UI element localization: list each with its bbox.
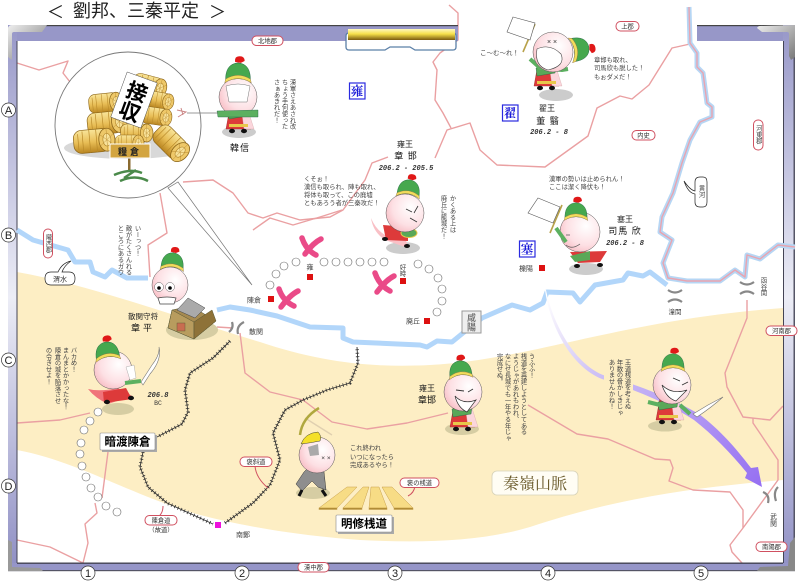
label: Sima Xin: 司馬 欣 — [608, 225, 642, 236]
speech: Dong Yi: 章邯も取れ、 — [594, 55, 632, 64]
region label: Di: 翟 — [504, 106, 516, 120]
speech: Zhang Han bottom: 桟道を再建しようとしてある — [520, 352, 527, 435]
commandery tag: Henan: 河南郡 — [772, 326, 792, 335]
axis marker 3 — [388, 566, 402, 580]
frame corner: top right — [757, 25, 795, 60]
label: Zhang Han bottom: 雍王 — [419, 384, 435, 393]
character: Zhang Han top — [371, 172, 424, 254]
gate: Sanguan — [229, 322, 244, 334]
battle mark: Chencang — [279, 289, 298, 307]
march route: Chencang road — [76, 408, 121, 516]
label: Zhang Ping: 散関守将 — [128, 311, 158, 321]
city: Yong: 雍 — [306, 264, 314, 272]
speech: Zhang Ping: ところにあるガウ — [116, 225, 124, 276]
city: Nanzheng: 南鄭 — [236, 530, 250, 539]
label: Wuguan: 武関 — [768, 512, 777, 528]
tag: Chencang road (old road): 陳倉道 — [152, 516, 171, 524]
sign: 接収 — [110, 72, 157, 129]
tag: Chencang road (old road) — [145, 506, 177, 534]
speech: Liu Bang's general: の令きせよ！ — [44, 347, 52, 385]
title: ＜ — [47, 3, 64, 22]
axis marker 2: 2 — [239, 568, 245, 580]
city: Yueyang: 櫟陽 — [519, 264, 533, 273]
commandery tag: Beidi — [252, 36, 283, 46]
label: Zhang Han top: 章 邯 — [394, 150, 418, 161]
river callout: Yellow River: 黄河 — [698, 184, 705, 198]
tile: Xianyang: 咸 — [467, 312, 476, 323]
speech: Han Xin — [272, 78, 296, 131]
speech: Zhang Han bottom: なにせ長城でも一年やる年じゃ — [504, 353, 511, 441]
character: miner repairing the plank road — [296, 408, 335, 499]
character: general grinning with sword — [648, 348, 723, 432]
speech: Han Xin: ちょう手何使った — [280, 79, 288, 130]
city: Feiqiu — [406, 316, 430, 326]
speech: Dong Yi: 司馬欣も脱した！ — [594, 63, 644, 72]
date: 206.8 BC — [147, 392, 169, 407]
title: 劉邦、三秦平定 — [73, 1, 199, 21]
Yellow River — [660, 7, 795, 281]
speech: Zhang Han retreat: 廃丘に籠城だ！ — [440, 194, 447, 239]
speech: Zhang Han: 将体も取って、この廃墟 — [304, 190, 373, 199]
axis marker 1: 1 — [85, 568, 91, 580]
label: Dong Yi: 翟王 — [539, 104, 555, 113]
region label: Yong: 雍 — [351, 84, 364, 98]
speech: Han Xin: さぁあきれだ！ — [272, 79, 280, 123]
city: Haozhi: 畤 — [400, 269, 407, 278]
label: Zhang Ping: 章平 — [131, 323, 155, 333]
axis marker 2 — [235, 566, 249, 580]
speech: Liu Bang's general — [44, 346, 77, 410]
sign: 糧倉: 糧倉 — [118, 146, 142, 157]
character: Dong Yi — [507, 17, 597, 101]
axis marker D: D — [5, 481, 13, 493]
Wei River — [17, 230, 667, 347]
commandery tag: Henan — [766, 326, 797, 336]
speech: Zhang Han retreat — [440, 194, 456, 239]
label: Sima Xin: 塞王 — [617, 214, 633, 224]
banner: 暗渡陳倉: 暗渡陳倉 — [104, 434, 151, 448]
speech: Zhang Han bottom: 完成せぬ。 — [496, 353, 503, 384]
title: ＞ — [209, 3, 226, 22]
axis marker 4 — [541, 566, 555, 580]
speech: Zhang Ping: 敵がたくさんれる — [124, 224, 132, 276]
mountain band: Qinling foothills — [17, 272, 783, 541]
speech: Zhang Han retreat: かくある上は — [448, 195, 456, 233]
banner: 暗渡陳倉 — [100, 433, 157, 452]
sign: 接収: 収 — [116, 98, 143, 127]
label: Tongguan: 潼関 — [668, 307, 682, 316]
speech: Zhang Han bottom: ようじゃがあれもわれ、 — [512, 353, 519, 422]
commandery tag: Hedong — [754, 120, 763, 150]
speech: general grinning: 年数の脅かしきじゃ — [616, 358, 623, 416]
speech: Zhang Han: 漢信も取られ、陣も取れ、 — [304, 182, 380, 191]
speech: Sima Xin: 漢軍の勢いは止められん！ — [549, 174, 625, 183]
speech: Liu Bang's general: まんまとかかったな！ — [62, 347, 69, 410]
speech: Liu Bang's general: バカめ！ — [70, 347, 77, 372]
axis marker 1 — [81, 566, 95, 580]
speech: Sima Xin: ここは潔く降伏も！ — [549, 182, 606, 191]
axis marker A: A — [5, 105, 13, 117]
railway roads — [140, 341, 358, 524]
speech: Sima Xin — [549, 174, 625, 191]
character: miner repairing the plank road: × × — [321, 455, 331, 462]
icon: rice bales — [73, 72, 193, 165]
city: Nanzheng — [215, 522, 250, 539]
label: Qinling Mountains — [492, 471, 578, 495]
axis marker C — [2, 353, 16, 367]
city: Feiqiu: 廃丘 — [406, 316, 420, 326]
label: Zhang Han bottom: 章邯 — [418, 394, 436, 405]
axis marker 3: 3 — [392, 568, 398, 580]
tag: Baoxie road: 褒斜道 — [247, 457, 266, 466]
commandery tag: Hedong: 河東郡 — [755, 125, 762, 145]
date: 206.8 BC: BC — [154, 400, 162, 407]
axis marker A — [2, 103, 16, 117]
commandery tag: Shang: 上郡 — [621, 22, 634, 30]
banner: 明修桟道: 明修桟道 — [341, 516, 387, 530]
axis marker 5 — [694, 566, 708, 580]
tile: Xianyang: 陽 — [467, 322, 476, 332]
label: Dong Yi: 206.2 - 8 — [530, 129, 569, 137]
speech: Zhang Han bottom — [496, 352, 535, 441]
character: Sima Xin — [528, 197, 607, 275]
character: Liu Bang's general with sword — [88, 334, 160, 415]
battle mark: Yong — [302, 238, 321, 255]
character: Dong Yi: × × — [547, 39, 557, 46]
city: Haozhi: 好 — [400, 262, 407, 272]
scroll ornament at top of frame — [346, 29, 456, 50]
speech: miner: これ終われ — [350, 443, 382, 452]
commandery tag: Neishi: 内史 — [637, 130, 650, 140]
label: Zhang Han top: 雍王 — [397, 140, 413, 149]
label: Sima Xin: 206.2 - 8 — [606, 240, 645, 248]
sign: 接収: 接 — [123, 79, 150, 107]
speech: Zhang Han: くそぉ！ — [304, 175, 329, 183]
label: Zhang Han bottom — [418, 384, 436, 405]
axis marker 5: 5 — [698, 568, 704, 580]
commandery tag: Hanzhong: 漢中郡 — [304, 562, 324, 572]
tag: Bao plank road — [400, 478, 439, 496]
speech: Zhang Han bottom: うふふ！ — [528, 353, 535, 378]
gate: Wuguan — [763, 487, 778, 503]
city: Haozhi — [400, 262, 407, 284]
speech: miner: いつになったら — [350, 453, 394, 461]
axis marker B — [2, 228, 16, 242]
label: Sima Xin — [606, 214, 645, 248]
commandery tag: Longxi: 隴西郡 — [44, 233, 52, 254]
axis marker 4: 4 — [545, 568, 551, 580]
gate: Tongguan — [668, 290, 682, 302]
speech: miner — [350, 443, 394, 469]
speech: Liu Bang's general: 陳倉の城を陥落させ — [54, 346, 61, 404]
city: Yong — [306, 264, 314, 280]
label: Dong Yi — [530, 104, 569, 137]
axis marker D — [2, 479, 16, 493]
frame corner: top left — [8, 25, 47, 60]
sign: 糧倉 — [110, 144, 150, 181]
date: 206.8 BC: 206.8 — [147, 392, 169, 400]
label: Zhang Ping — [128, 311, 158, 333]
axis marker C: C — [5, 355, 13, 367]
label: Hangu pass: 函谷関 — [760, 277, 767, 297]
character: Zhang Han bottom grinning — [444, 354, 482, 435]
banner: 明修桟道 — [336, 515, 394, 534]
tag: Baoxie road — [240, 457, 272, 488]
axis marker B: B — [5, 230, 12, 242]
label: Dong Yi: 董 翳 — [536, 115, 560, 126]
speech: Zhang Ping: いーっつ！ — [134, 225, 141, 257]
label: Zhang Han top: 206.2 - 205.5 — [379, 165, 434, 173]
label: Zhang Han top — [379, 140, 434, 173]
speech: miner: 完成あるやら！ — [350, 460, 394, 469]
commandery tag: Longxi — [44, 229, 52, 258]
tile: Xianyang — [462, 311, 481, 333]
tag: Bao plank road: 褒の桟道 — [407, 478, 433, 487]
speech: Zhang Han: ともあろう者が三秦攻だ！ — [304, 198, 380, 207]
river callout: Wei River: 渭水 — [53, 274, 67, 284]
commandery tag: Nanyang — [756, 542, 787, 552]
commandery tag: Beidi: 北地郡 — [258, 36, 278, 45]
speech: general grinning: ありませんかね！ — [608, 359, 615, 410]
commandery tag: Nanyang: 南陽郡 — [762, 542, 782, 551]
region label: Sai: 塞 — [521, 242, 534, 256]
river callout: Yellow River — [684, 177, 707, 207]
commandery tag: Hanzhong — [298, 562, 329, 572]
commandery tag: Neishi — [632, 130, 655, 140]
title — [47, 1, 226, 22]
speech: Han Xin: 漢軍さえあされ改 — [288, 78, 296, 131]
gate: Hangu — [740, 282, 754, 294]
river callout: Wei River — [45, 261, 75, 285]
character: Han Xin — [177, 56, 258, 138]
campaign arrow: Liu Bang's advance — [545, 290, 762, 487]
march route: Chencang to Feiqiu — [266, 258, 446, 316]
icon: plank road boards — [319, 487, 413, 510]
character: Zhang Ping — [152, 246, 188, 304]
tag: Chencang road (old road): （故道） — [148, 525, 174, 534]
speech: Dong Yi: もぉダメだ！ — [594, 72, 632, 81]
label: Han Xin: 韓信 — [230, 142, 250, 153]
speech: Zhang Han — [304, 175, 380, 207]
label: Sanguan: 散関 — [249, 327, 263, 336]
city: Chencang: 陳倉 — [247, 296, 261, 304]
icon: Sanguan fortress — [166, 298, 218, 340]
city: Chencang — [247, 296, 274, 304]
battle mark: Haozhi — [375, 273, 394, 292]
commandery tag: Shang — [616, 22, 639, 31]
frame corner: bottom right — [757, 537, 795, 571]
magnifier lens: granary — [55, 52, 252, 285]
speech: Zhang Ping — [116, 224, 141, 276]
speech: Dong Yi — [594, 55, 644, 81]
speech: Dong Yi call: こ〜む〜れ！ — [480, 49, 519, 57]
frame corner: bottom left — [8, 540, 43, 571]
speech: general grinning: 王道桟道を考えぬ — [624, 359, 631, 410]
speech: general grinning — [608, 358, 631, 416]
city: Yueyang — [519, 264, 545, 273]
label: Qinling Mountains: 秦嶺山脈 — [503, 475, 567, 493]
